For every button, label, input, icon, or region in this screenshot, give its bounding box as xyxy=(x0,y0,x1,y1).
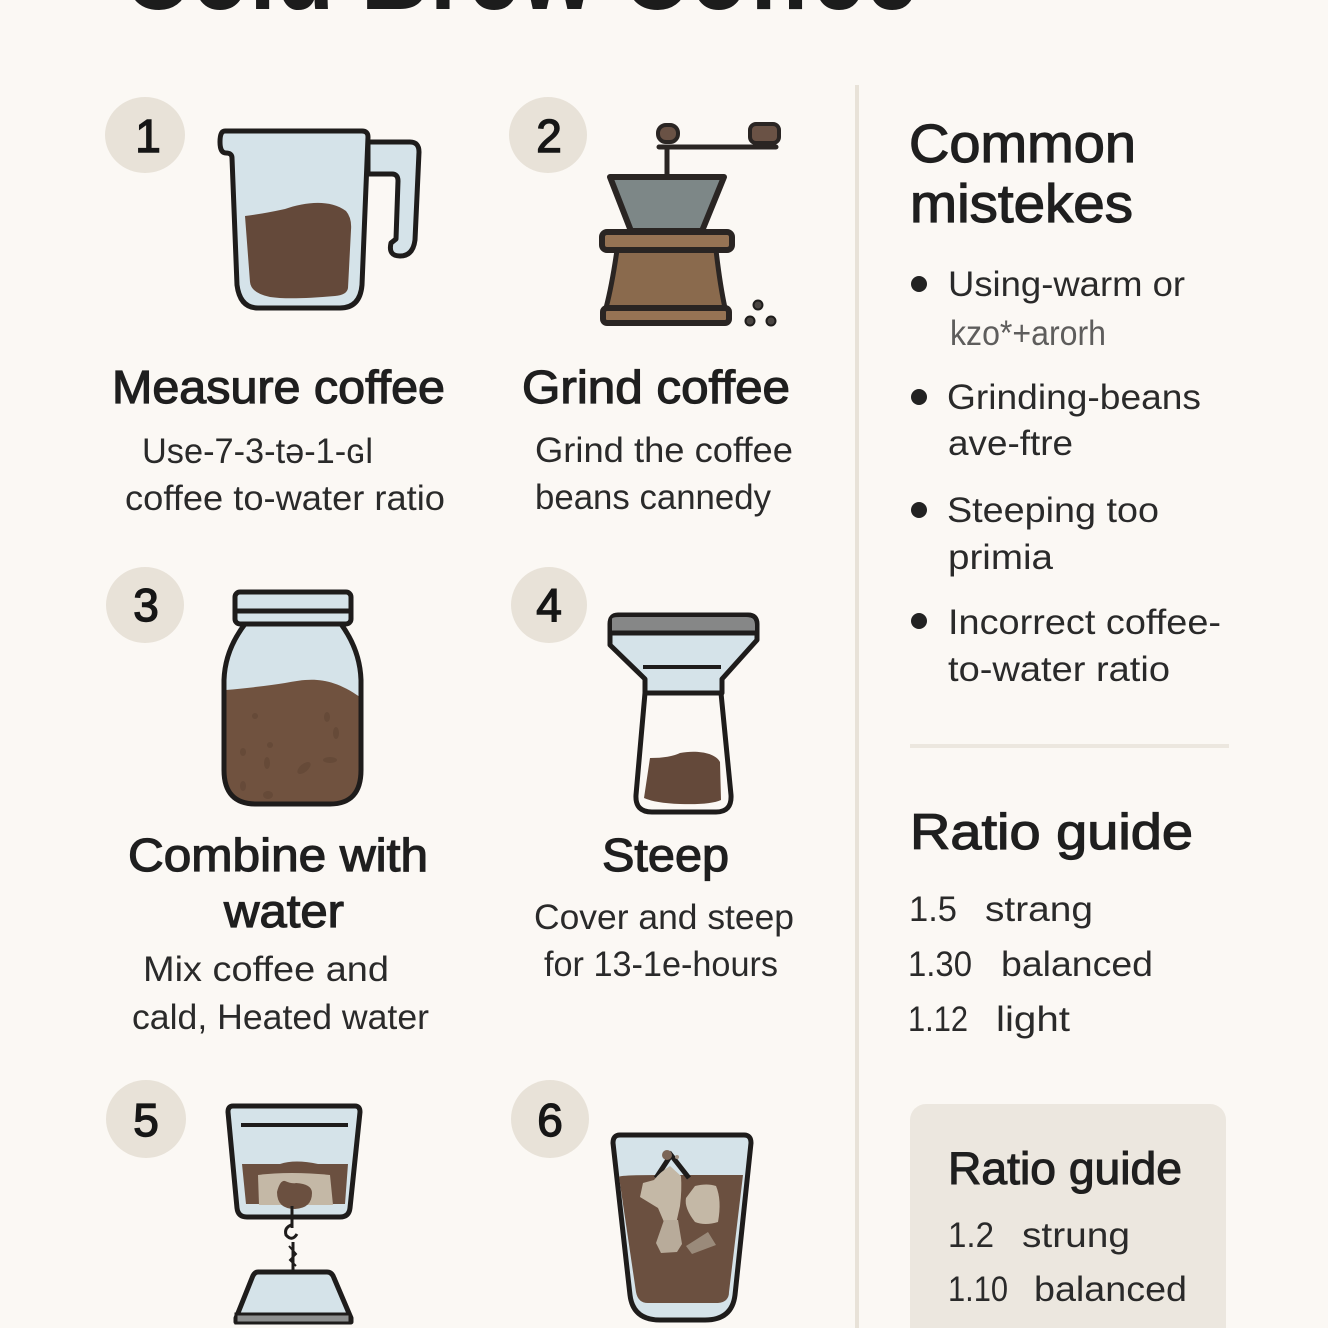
divider: sidebar rule xyxy=(910,744,1229,748)
bullet: grinding mistake: Grinding-beans xyxy=(947,378,1201,417)
panel: ratio guide xyxy=(908,804,1193,1039)
heading: common mistakes: mistekes xyxy=(910,174,1133,234)
card ratio list xyxy=(948,1216,1187,1309)
bullet: ratio mistake: to-water ratio xyxy=(948,650,1170,689)
step 5: strain xyxy=(106,1080,360,1323)
card ratio list: balanced xyxy=(1034,1270,1187,1309)
description: measure coffee: Use-7-3-tə-1-ɢl xyxy=(142,432,373,471)
bullet: steeping mistake: primia xyxy=(948,538,1054,577)
bullet: ratio mistake xyxy=(911,603,1221,689)
card ratio list: 1.2 xyxy=(948,1216,994,1255)
description: measure coffee: coffee to-water ratio xyxy=(125,479,445,518)
bullet: warm water mistake: Using-warm or xyxy=(948,265,1185,304)
divider: column separator xyxy=(855,85,859,1328)
ratio list: balanced xyxy=(1001,945,1153,984)
step number 3: 3 xyxy=(133,579,159,631)
description: grind coffee: Grind the coffee xyxy=(535,431,793,470)
description: steep: Cover and steep xyxy=(534,898,794,937)
description: grind coffee: beans cannedy xyxy=(535,478,771,517)
heading: combine with water xyxy=(128,829,428,937)
bullet: warm water mistake: kzo*+arorh xyxy=(950,314,1106,353)
description: combine with water: cald, Heated water xyxy=(132,998,429,1037)
bullet: steeping mistake: Steeping too xyxy=(947,491,1159,530)
ratio list: 1.5 xyxy=(909,890,957,929)
heading: common mistakes xyxy=(909,114,1136,234)
icon: steeping vessel xyxy=(610,615,757,812)
heading: steep: Steep xyxy=(602,829,729,881)
step 4: steep xyxy=(511,567,794,984)
icon: iced coffee glass xyxy=(613,1135,751,1320)
step number 6: 6 xyxy=(537,1094,563,1146)
heading: ratio guide: Ratio guide xyxy=(910,804,1193,860)
description: steep xyxy=(534,898,794,984)
icon: filter strainer over base xyxy=(228,1106,360,1323)
ratio list: 1.12 xyxy=(908,1000,968,1039)
description: measure coffee xyxy=(125,432,445,518)
ratio list: strang xyxy=(985,890,1093,929)
step number 3 xyxy=(106,567,184,643)
description: steep: for 13-1e-hours xyxy=(544,945,778,984)
step number 6 xyxy=(511,1080,589,1158)
bullet: grinding mistake: ave-ftre xyxy=(948,424,1073,463)
icon: coffee grinder xyxy=(602,124,779,326)
ratio list: light xyxy=(996,1000,1070,1039)
step number 4: 4 xyxy=(536,579,562,631)
card ratio list: 1.10 xyxy=(948,1270,1008,1309)
icon: measuring jug with coffee xyxy=(220,131,419,308)
icon: jar with coffee and water xyxy=(224,592,361,804)
description: grind coffee xyxy=(535,431,793,517)
ratio list xyxy=(908,890,1153,1039)
panel: common mistakes xyxy=(909,114,1221,689)
description: combine with water: Mix coffee and xyxy=(143,950,389,989)
bullet: grinding mistake xyxy=(911,378,1201,463)
bullet: warm water mistake xyxy=(911,265,1185,353)
step number 1 xyxy=(105,97,185,173)
step 1: measure coffee xyxy=(105,97,445,518)
ratio list: 1.30 xyxy=(908,945,972,984)
heading: common mistakes: Common xyxy=(909,114,1136,174)
step number 2: 2 xyxy=(536,110,562,162)
step number 2 xyxy=(509,97,587,173)
heading: combine with water: water xyxy=(223,885,344,937)
heading: combine with water: Combine with xyxy=(128,829,428,881)
step number 4 xyxy=(511,567,587,643)
heading: grind coffee: Grind coffee xyxy=(522,361,790,413)
card heading: Ratio guide xyxy=(948,1143,1182,1194)
bullet: steeping mistake xyxy=(911,491,1159,577)
description: combine with water xyxy=(132,950,429,1037)
step 6: serve xyxy=(511,1080,751,1320)
step 2: grind coffee xyxy=(509,97,793,517)
step number 5 xyxy=(106,1080,186,1158)
step number 5: 5 xyxy=(133,1094,159,1146)
bullet: ratio mistake: Incorrect coffee- xyxy=(948,603,1221,642)
heading: measure coffee: Measure coffee xyxy=(112,361,445,413)
card: ratio guide callout xyxy=(910,1104,1226,1328)
card ratio list: strung xyxy=(1022,1216,1130,1255)
step 3: combine with water xyxy=(106,567,429,1037)
step number 1: 1 xyxy=(135,110,161,162)
